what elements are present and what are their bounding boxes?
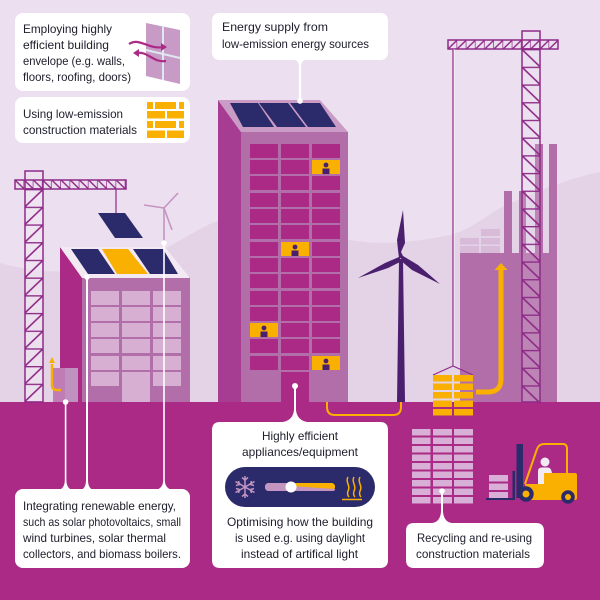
icon: bricks bbox=[147, 102, 184, 138]
icon: window with heat arrows bbox=[129, 23, 180, 84]
appliances text: appliances/equipment bbox=[242, 445, 359, 459]
centre building bbox=[218, 100, 348, 402]
renewable energy text: Integrating renewable energy, bbox=[23, 499, 176, 513]
appliances text: Highly efficient bbox=[262, 429, 339, 443]
icon: snowflake bbox=[236, 476, 254, 498]
centre building door bbox=[281, 372, 309, 402]
slider bbox=[265, 482, 335, 492]
renewable energy text: such as solar photovoltaics, small bbox=[23, 515, 181, 529]
centre rooftop solar panels bbox=[230, 103, 336, 127]
forklift load bbox=[489, 475, 508, 498]
envelope text: Employing highly bbox=[23, 22, 112, 36]
factory yellow arrow bbox=[476, 263, 508, 392]
callout: energy supply bbox=[212, 13, 388, 104]
materials text: construction materials bbox=[23, 123, 137, 137]
callout: appliances and daylight bbox=[212, 383, 388, 568]
rooftop solar panels bbox=[71, 249, 178, 274]
underground pipe bbox=[327, 402, 401, 415]
left building windows bbox=[91, 291, 181, 402]
lit windows with occupants bbox=[250, 160, 340, 370]
leader lines bbox=[59, 240, 172, 490]
materials text: Using low-emission bbox=[23, 107, 123, 121]
forklift bbox=[486, 444, 577, 504]
envelope text: floors, roofing, doors) bbox=[23, 70, 131, 84]
left small arrow and blocks bbox=[49, 357, 78, 402]
right crane bbox=[433, 31, 558, 402]
factory upper blocks bbox=[460, 229, 500, 253]
energy supply text: Energy supply from bbox=[222, 20, 328, 34]
hoisted solar panel bbox=[98, 213, 143, 238]
icon: heat bbox=[342, 477, 362, 500]
recycling text: construction materials bbox=[416, 547, 530, 561]
recycling text: Recycling and re-using bbox=[417, 531, 532, 545]
envelope text: efficient building bbox=[23, 38, 109, 52]
callout: recycling bbox=[406, 488, 544, 568]
factory bbox=[460, 144, 557, 402]
envelope text: envelope (e.g. walls, bbox=[23, 54, 125, 68]
left crane bbox=[15, 171, 126, 402]
recycled materials stack bbox=[412, 429, 473, 504]
daylight text: instead of artifical light bbox=[241, 547, 359, 561]
small wind turbine bbox=[144, 193, 178, 244]
ground bbox=[0, 402, 600, 600]
centre building windows bbox=[250, 144, 340, 370]
renewable energy text: collectors, and biomass boilers. bbox=[23, 547, 181, 561]
daylight text: Optimising how the building bbox=[227, 515, 373, 529]
forklift wheels bbox=[518, 486, 575, 504]
left building bbox=[60, 247, 190, 402]
forklift mast and forks bbox=[486, 444, 523, 500]
renewable energy text: wind turbines, solar thermal bbox=[22, 531, 166, 545]
callout: low-emission materials bbox=[15, 97, 190, 143]
background hills bbox=[0, 172, 600, 402]
energy supply text: low-emission energy sources bbox=[222, 37, 369, 51]
large wind turbine bbox=[358, 210, 440, 402]
callout: building envelope bbox=[15, 13, 190, 91]
hoisted bricks bbox=[433, 375, 473, 416]
daylight text: is used e.g. using daylight bbox=[235, 531, 366, 545]
callout: renewable energy bbox=[15, 240, 190, 568]
forklift body bbox=[525, 473, 577, 500]
forklift cab bbox=[525, 444, 567, 484]
thermostat control bbox=[225, 467, 375, 507]
forklift driver bbox=[538, 458, 552, 484]
